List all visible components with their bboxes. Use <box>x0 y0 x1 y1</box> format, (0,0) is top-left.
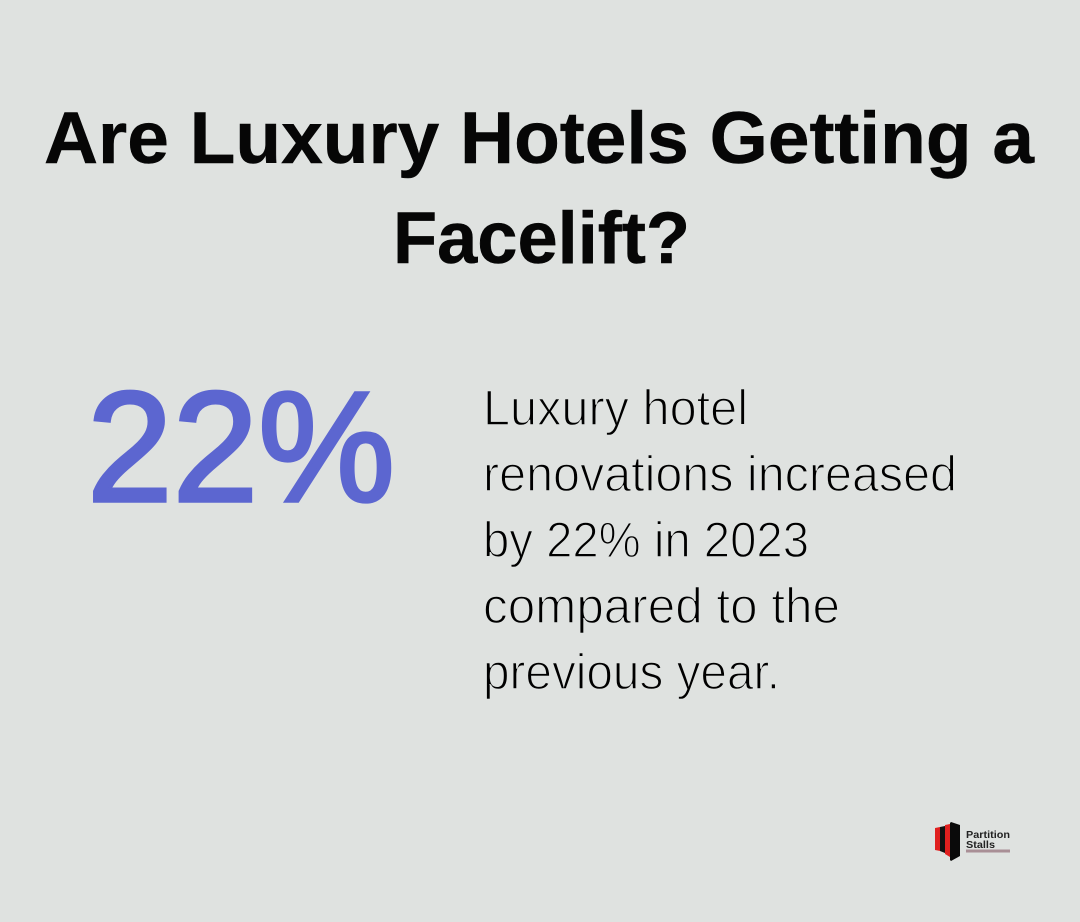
logo wordmark: Partition <box>966 829 1010 841</box>
title: Are Luxury Hotels Getting a <box>44 98 1035 179</box>
description text: by 22% in 2023 <box>483 512 809 568</box>
description text: previous year. <box>483 644 780 700</box>
logo wordmark: Stalls <box>966 839 995 851</box>
big statistic: 22%: 22% <box>87 360 395 535</box>
logo: Partition Stalls <box>935 822 1010 861</box>
description text: compared to the <box>483 578 840 634</box>
title: Facelift? <box>393 198 690 279</box>
title <box>44 98 1035 279</box>
logo wordmark <box>966 829 1010 851</box>
description text: Luxury hotel <box>483 380 748 436</box>
icon: partition bars <box>935 822 960 861</box>
logo tagline strip <box>966 850 1010 852</box>
description text <box>483 380 957 700</box>
description text: renovations increased <box>483 446 957 502</box>
